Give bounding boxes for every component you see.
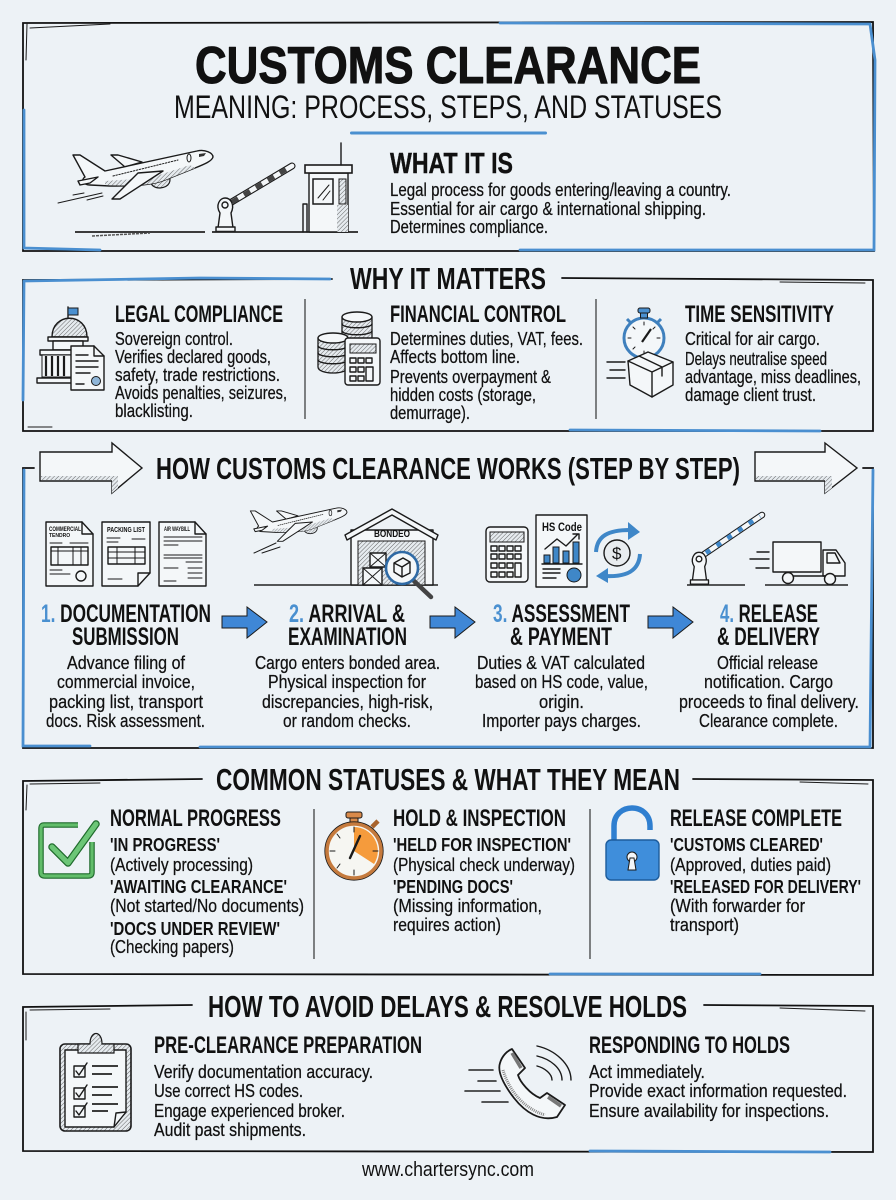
step 1 text: commercial invoice, xyxy=(57,672,195,692)
arrow: section left xyxy=(40,443,142,493)
step 4 text: proceeds to final delivery. xyxy=(679,692,859,712)
icon: ringing telephone xyxy=(465,1046,571,1118)
subtitle: MEANING: PROCESS, STEPS, AND STATUSES xyxy=(174,89,722,125)
text block: pre-clearance preparation: Use correct HS codes. xyxy=(154,1081,303,1101)
title rule xyxy=(350,132,547,134)
status list: hold and inspection: (Missing information, xyxy=(393,896,542,916)
heading: financial control: FINANCIAL CONTROL xyxy=(390,301,566,328)
status list: normal progress: 'AWAITING CLEARANCE' xyxy=(110,877,287,897)
heading: legal compliance: LEGAL COMPLIANCE xyxy=(115,301,283,328)
status list: normal progress: 'IN PROGRESS' xyxy=(110,835,220,855)
icon: orange stopwatch xyxy=(327,812,381,878)
text block: pre-clearance preparation: Engage experienced broker. xyxy=(154,1101,345,1121)
icon: green check box xyxy=(41,824,96,876)
icon: government building and document xyxy=(37,307,104,390)
heading: what it is: WHAT IT IS xyxy=(390,148,513,180)
step 2 text xyxy=(255,653,440,731)
column dividers xyxy=(305,299,596,419)
icon: guard booth xyxy=(303,143,352,232)
icon: calculator, HS code chart and currency cycle: $ xyxy=(612,544,622,563)
icon: open blue padlock xyxy=(606,808,659,880)
step 2 text: Cargo enters bonded area. xyxy=(255,653,440,673)
step 3 heading: & PAYMENT xyxy=(510,623,612,651)
column dividers xyxy=(314,809,590,959)
status list: release complete: transport) xyxy=(670,915,739,935)
step 2 heading xyxy=(288,600,407,651)
text block: what it is: Essential for air cargo & international shipping. xyxy=(390,199,706,219)
status list: normal progress xyxy=(110,835,304,957)
text block: legal compliance: Avoids penalties, seizures, xyxy=(115,383,287,403)
step 2 text: or random checks. xyxy=(283,711,411,731)
icon: coin stacks and calculator xyxy=(318,312,380,385)
step 4 heading: 4. RELEASE xyxy=(720,600,818,628)
panel: avoid delays xyxy=(23,989,873,1152)
heading: common statuses: COMMON STATUSES & WHAT THEY MEAN xyxy=(216,762,680,797)
icon: calculator, HS code chart and currency cycle: HS Code xyxy=(542,520,582,534)
status list: normal progress: (Actively processing) xyxy=(110,855,253,875)
arrow: step 2 to 3 xyxy=(430,607,475,638)
step 4 heading xyxy=(717,600,820,651)
step 2 heading: 2. ARRIVAL & xyxy=(289,600,405,628)
text block: financial control: Determines duties, VAT, fees. xyxy=(390,329,583,349)
text block: time sensitivity xyxy=(685,329,861,405)
icon: plane and bonded warehouse: BONDEO xyxy=(374,528,410,540)
panel: how customs clearance works xyxy=(23,443,873,748)
text block: financial control xyxy=(390,329,583,423)
text block: legal compliance xyxy=(115,329,287,421)
text block: pre-clearance preparation: Verify documentation accuracy. xyxy=(154,1062,373,1082)
heading: normal progress: NORMAL PROGRESS xyxy=(110,805,281,832)
title: CUSTOMS CLEARANCE xyxy=(195,37,701,95)
arrow: step 1 to 2 xyxy=(222,607,267,638)
text block: what it is: Determines compliance. xyxy=(390,217,548,237)
step 4 text: Clearance complete. xyxy=(699,711,838,731)
status list: release complete: (With forwarder for xyxy=(670,896,805,916)
icon: plane and bonded warehouse xyxy=(250,508,438,597)
icon: shipping documents: TENDRO xyxy=(49,533,70,539)
text block: financial control: demurrage). xyxy=(390,403,470,423)
text block: responding to holds: Act immediately. xyxy=(589,1062,705,1082)
step 2 text: discrepancies, high-risk, xyxy=(262,692,433,712)
heading: avoid delays: HOW TO AVOID DELAYS & RESOLVE HOLDS xyxy=(208,989,687,1024)
text block: financial control: hidden costs (storage, xyxy=(390,385,536,405)
step 3 heading xyxy=(493,600,630,651)
step 1 text: Advance filing of xyxy=(67,653,186,673)
text block: financial control: Affects bottom line. xyxy=(390,347,520,367)
step 1 text: packing list, transport xyxy=(49,692,203,712)
text block: financial control: Prevents overpayment & xyxy=(390,367,551,387)
icon: shipping documents: PACKING LIST xyxy=(107,527,146,534)
text block: responding to holds xyxy=(589,1062,847,1121)
step 3 text: origin. xyxy=(539,692,584,712)
icon: checklist clipboard xyxy=(60,1034,131,1131)
status list: normal progress: (Not started/No documents) xyxy=(110,896,304,916)
step 4 text: notification. Cargo xyxy=(704,672,833,692)
step 4 heading: & DELIVERY xyxy=(717,623,820,651)
panel: why it matters xyxy=(23,261,873,431)
status list: release complete: 'CUSTOMS CLEARED' xyxy=(670,835,823,855)
icon: calculator, HS code chart and currency cycle xyxy=(486,515,640,587)
panel: common statuses xyxy=(23,762,873,975)
panel: title and what it is xyxy=(23,22,875,251)
status list: hold and inspection: 'HELD FOR INSPECTION' xyxy=(393,835,571,855)
step 3 text xyxy=(475,653,648,731)
text block: what it is xyxy=(390,180,731,237)
text block: legal compliance: blacklisting. xyxy=(115,401,193,421)
icon: stopwatch with parcel xyxy=(607,308,673,397)
text block: time sensitivity: Critical for air cargo. xyxy=(685,329,820,349)
icon: shipping documents: COMMERCIAL xyxy=(49,527,81,533)
status list: hold and inspection: requires action) xyxy=(393,915,501,935)
heading: time sensitivity: TIME SENSITIVITY xyxy=(685,301,834,328)
text block: responding to holds: Provide exact information requested. xyxy=(589,1081,847,1101)
step 4 text xyxy=(679,653,859,731)
step 3 text: Duties & VAT calculated xyxy=(477,653,645,673)
heading: hold and inspection: HOLD & INSPECTION xyxy=(393,805,566,832)
status list: release complete: (Approved, duties paid) xyxy=(670,855,831,875)
step 3 text: Importer pays charges. xyxy=(482,711,641,731)
status list: release complete xyxy=(670,835,861,935)
step 1 heading: SUBMISSION xyxy=(72,623,179,651)
step 1 heading: 1. DOCUMENTATION xyxy=(41,600,211,628)
arrow: section right xyxy=(755,443,857,493)
step 1 text xyxy=(46,653,205,731)
status list: hold and inspection: 'PENDING DOCS' xyxy=(393,877,513,897)
arrow: step 3 to 4 xyxy=(648,607,693,638)
text block: time sensitivity: damage client trust. xyxy=(685,385,816,405)
heading: pre-clearance preparation: PRE-CLEARANCE PREPARATION xyxy=(154,1032,422,1059)
icon: shipping documents xyxy=(46,522,206,586)
icon: barrier and delivery truck xyxy=(687,515,848,585)
step 2 heading: EXAMINATION xyxy=(288,623,407,651)
text block: legal compliance: Sovereign control. xyxy=(115,329,233,349)
text block: time sensitivity: Delays neutralise speed xyxy=(685,349,827,369)
text block: responding to holds: Ensure availability for inspections. xyxy=(589,1101,829,1121)
icon: airplane taking off xyxy=(58,150,213,236)
heading: responding to holds: RESPONDING TO HOLDS xyxy=(589,1032,790,1059)
text block: what it is: Legal process for goods entering/leaving a country. xyxy=(390,180,731,200)
step 3 text: based on HS code, value, xyxy=(475,672,648,692)
text block: pre-clearance preparation: Audit past shipments. xyxy=(154,1120,306,1140)
icon: customs barrier xyxy=(212,166,358,232)
status list: normal progress: (Checking papers) xyxy=(110,937,234,957)
step 2 text: Physical inspection for xyxy=(268,672,426,692)
step 4 text: Official release xyxy=(717,653,818,673)
step 1 text: docs. Risk assessment. xyxy=(46,711,205,731)
step 3 heading: 3. ASSESSMENT xyxy=(493,600,630,628)
icon: shipping documents: AIR WAYBILL xyxy=(164,527,190,533)
footer url: www.chartersync.com xyxy=(361,1159,534,1181)
text block: legal compliance: safety, trade restrictions. xyxy=(115,365,280,385)
text block: pre-clearance preparation xyxy=(154,1062,373,1140)
heading: why it matters: WHY IT MATTERS xyxy=(350,261,546,296)
step 1 heading xyxy=(41,600,211,651)
status list: normal progress: 'DOCS UNDER REVIEW' xyxy=(110,919,280,939)
text block: legal compliance: Verifies declared goods, xyxy=(115,347,271,367)
status list: hold and inspection xyxy=(393,835,575,935)
status list: hold and inspection: (Physical check underway) xyxy=(393,855,575,875)
